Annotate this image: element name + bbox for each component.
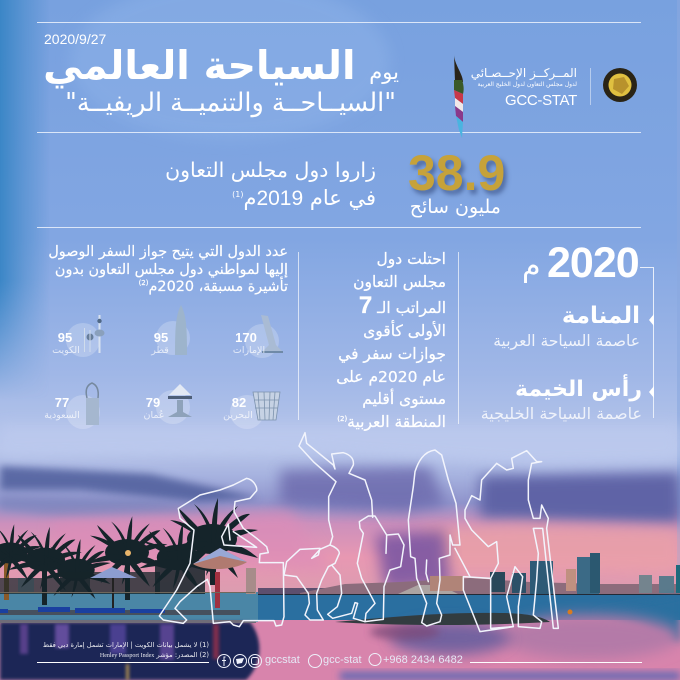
panel: passport ranking xyxy=(336,250,446,431)
panel: visa-free heading xyxy=(48,244,288,295)
top rule xyxy=(37,22,641,23)
stat rule xyxy=(37,227,641,228)
icons: landmark buildings xyxy=(66,306,283,429)
source note: (2) المصدر: مؤشر Henley Passport Index xyxy=(100,651,209,659)
divider xyxy=(458,252,459,424)
panel: visa-free heading: تأشيرة مسبقة، 2020م(2) xyxy=(139,279,288,295)
figure: pointing person xyxy=(299,433,373,545)
value: Oman: 79 xyxy=(146,395,160,410)
stat unit: مليون سائح xyxy=(410,196,501,218)
value: UAE: 170 xyxy=(235,330,257,345)
logo tagline: لدول مجلس التعاون لدول الخليج العربية xyxy=(478,81,577,88)
label: Saudi Arabia: السعودية xyxy=(44,410,80,421)
icon: Saudi tower xyxy=(86,383,99,425)
figure: woman xyxy=(408,450,470,626)
footnotes: (1) لا يشمل بيانات الكويت | الإمارات تشمل إمارة دبي فقط xyxy=(43,641,209,649)
panel: visa-free heading: إليها لمواطني دول مجلس التعاون بدون xyxy=(55,262,288,278)
stat: 38.9: 38.9 xyxy=(408,145,505,201)
logo divider xyxy=(590,68,591,105)
logo wordmark: GCC-STAT xyxy=(505,92,577,109)
social handle: gccstat xyxy=(265,654,300,666)
city caption: عاصمة السياحة العربية xyxy=(493,332,640,350)
icon: UAE tower xyxy=(261,315,283,353)
sea and reflections xyxy=(240,595,680,680)
logo: GCC emblem xyxy=(603,68,637,102)
panel: capitals of tourism xyxy=(481,239,654,423)
label: Qatar: قطر xyxy=(151,345,169,356)
divider xyxy=(298,252,299,420)
snapchat handle: gcc-stat xyxy=(323,654,362,666)
bracket xyxy=(640,267,654,418)
palm trees xyxy=(0,498,258,605)
header rule xyxy=(37,132,641,133)
social icons xyxy=(217,653,382,668)
label: UAE: الإمارات xyxy=(233,345,265,356)
figure: bending man xyxy=(159,478,284,627)
value: Bahrain: 82 xyxy=(232,395,246,410)
subtitle: "السيــاحــة والتنميــة الريفيــة" xyxy=(65,88,396,118)
figure: hiker xyxy=(463,451,558,632)
footer rule right xyxy=(470,662,642,663)
icon: Qatar tower xyxy=(175,305,187,355)
title: يوم السياحة العالمي xyxy=(43,43,399,89)
city: Manama: المنامة xyxy=(562,303,640,329)
figure: left child xyxy=(284,545,365,622)
footer rule left xyxy=(37,662,209,663)
logo: GCC-STAT xyxy=(454,56,577,138)
pool and deck xyxy=(0,568,259,680)
icon: Oman fort xyxy=(168,384,192,417)
value: Qatar: 95 xyxy=(154,330,168,345)
skyline xyxy=(258,553,680,595)
logo name: المــركــز الإحــصـائي xyxy=(471,66,577,80)
parasols and deck xyxy=(0,548,256,623)
panel: passport ranking: عام 2020م على xyxy=(336,368,446,386)
panel: passport ranking: احتلت دول xyxy=(376,250,446,268)
panel: visa-free heading: عدد الدول التي يتيح جواز السفر الوصول xyxy=(48,244,288,260)
icon: Bahrain building xyxy=(253,392,280,420)
panel: passport ranking: مستوى أقليم xyxy=(362,390,446,408)
year suffix: م xyxy=(522,249,541,284)
city caption: عاصمة السياحة الخليجية xyxy=(481,404,642,423)
figure: right child with backpack xyxy=(357,516,404,622)
panel: passport ranking: المنطقة العربية(2) xyxy=(337,413,446,431)
label: Bahrain: البحرين xyxy=(223,410,253,421)
clouds xyxy=(0,425,680,590)
panel: passport ranking: المراتب الـ 7 xyxy=(359,292,446,319)
label: Kuwait: الكويت xyxy=(52,345,80,356)
value: Saudi Arabia: 77 xyxy=(55,395,69,410)
city: Ras Al Khaimah: رأس الخيمة xyxy=(515,377,642,402)
panel: passport ranking: الأولى كأقوى xyxy=(363,322,446,340)
year: 2020 xyxy=(547,239,639,287)
phone number: +968 2434 6482 xyxy=(383,654,463,666)
panel: passport ranking: مجلس التعاون xyxy=(353,273,446,291)
date: 2020/9/27 xyxy=(44,31,106,47)
icon: Kuwait towers xyxy=(84,315,104,353)
label: Oman: عُمان xyxy=(143,410,165,421)
value: Kuwait: 95 xyxy=(58,330,72,345)
stat text line 2: في عام 2019م(1) xyxy=(232,186,376,210)
stat text: زاروا دول مجلس التعاون xyxy=(165,158,376,182)
panel: passport ranking: جوازات سفر في xyxy=(338,345,446,363)
